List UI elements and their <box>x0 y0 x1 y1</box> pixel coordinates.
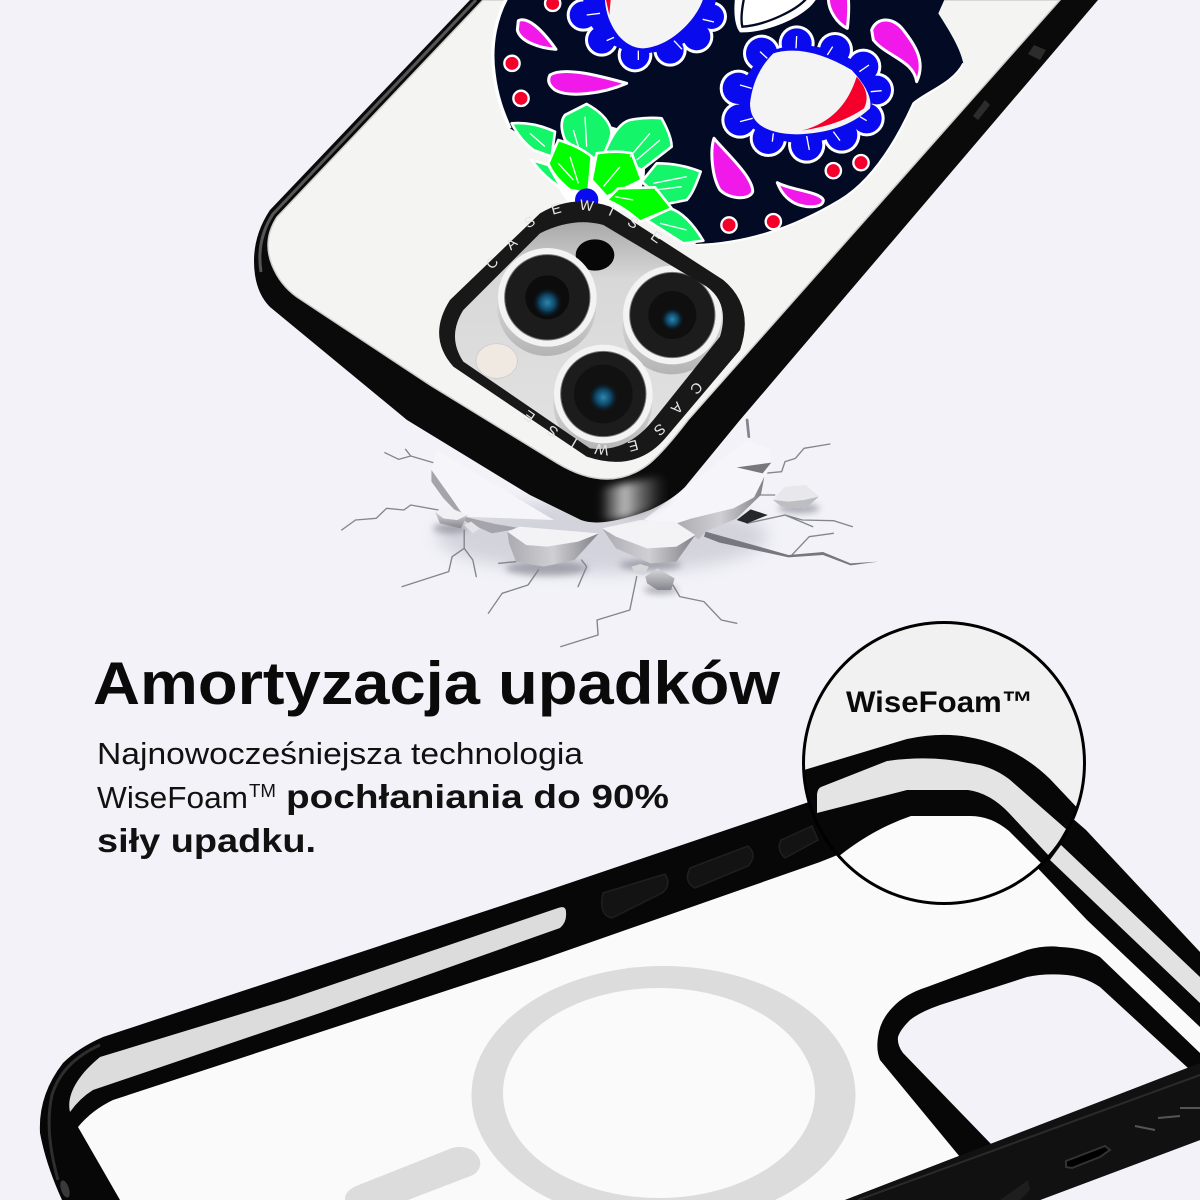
rim highlight <box>260 0 476 272</box>
brand ring text: W <box>579 197 595 215</box>
speaker hole <box>58 1179 72 1199</box>
bottom rim <box>845 1063 1200 1200</box>
description text: TM <box>249 781 276 801</box>
skull silhouette <box>493 0 963 244</box>
brand ring text: S <box>544 421 562 440</box>
description text <box>97 736 669 859</box>
flash <box>476 344 517 378</box>
description text: WiseFoam <box>97 780 248 815</box>
camera cutout frame <box>877 946 1200 1157</box>
bottom button <box>1000 1180 1030 1200</box>
case bumper <box>254 0 1098 522</box>
brand ring text: S <box>650 420 668 438</box>
magnified rim <box>804 735 1084 903</box>
brand ring text: S <box>624 214 641 233</box>
magnifier outline <box>804 622 1084 904</box>
right eye <box>720 25 894 164</box>
brand ring text <box>483 197 705 458</box>
brand ring text: C <box>686 378 705 397</box>
skull white halo <box>493 0 510 128</box>
microphone <box>576 239 614 271</box>
magnifier background <box>804 623 1084 903</box>
bottom port <box>1066 1146 1110 1168</box>
corner sheen <box>600 476 672 520</box>
clear panel <box>78 826 1200 1200</box>
lens one <box>497 248 597 356</box>
main fissure <box>704 532 878 565</box>
black bumper frame <box>40 769 1200 1200</box>
impact shadow <box>437 500 768 573</box>
chunk shadows <box>433 503 820 594</box>
magsafe ring <box>472 966 856 1200</box>
camera bumper <box>439 201 745 462</box>
brand ring text: A <box>503 235 521 254</box>
brand ring text: E <box>521 406 538 425</box>
nose <box>734 0 817 32</box>
description text: Najnowocześniejsza technologia <box>97 736 584 771</box>
brand ring text: E <box>550 201 563 219</box>
description text: siły upadku. <box>97 822 316 859</box>
raised slabs <box>431 450 554 520</box>
camera cutout opening <box>898 974 1188 1145</box>
lens three <box>553 345 653 453</box>
foam slot left <box>69 907 566 1112</box>
magsafe alignment pill <box>345 1147 480 1200</box>
brand ring text: C <box>483 254 502 273</box>
rim grip marks <box>1135 1108 1200 1130</box>
volume buttons <box>602 826 818 918</box>
red dots <box>504 0 869 233</box>
brand ring text: W <box>594 440 610 458</box>
camera module <box>439 197 745 462</box>
foam slot right <box>1050 845 1200 1003</box>
heading: Amortyzacja upadków <box>93 650 780 717</box>
clear back panel <box>268 0 1060 479</box>
WiseFoam magnifier callout <box>804 622 1084 904</box>
left eye <box>567 0 727 72</box>
camera window <box>455 222 723 449</box>
rim highlights <box>49 1045 100 1180</box>
magnifier label: WiseFoam™ <box>846 686 1033 719</box>
brand ring text: I <box>606 204 616 220</box>
side buttons on rim <box>973 45 1046 120</box>
pink teardrops <box>517 0 920 207</box>
crack lines <box>342 420 852 647</box>
brand ring text: E <box>626 436 640 454</box>
brand ring text: S <box>522 213 539 232</box>
description text: pochłaniania do 90% <box>286 778 669 815</box>
lens two <box>622 266 722 374</box>
cracked ground <box>342 420 878 647</box>
rock chunks <box>507 532 599 567</box>
top phone with case <box>254 0 1098 522</box>
bottom phone case interior <box>40 769 1200 1200</box>
sugar skull artwork <box>493 0 963 245</box>
brand ring text: E <box>647 228 665 247</box>
slab walls <box>431 470 521 533</box>
green flower <box>512 104 703 243</box>
brand ring text: I <box>569 434 580 450</box>
brand ring text: A <box>667 398 686 417</box>
